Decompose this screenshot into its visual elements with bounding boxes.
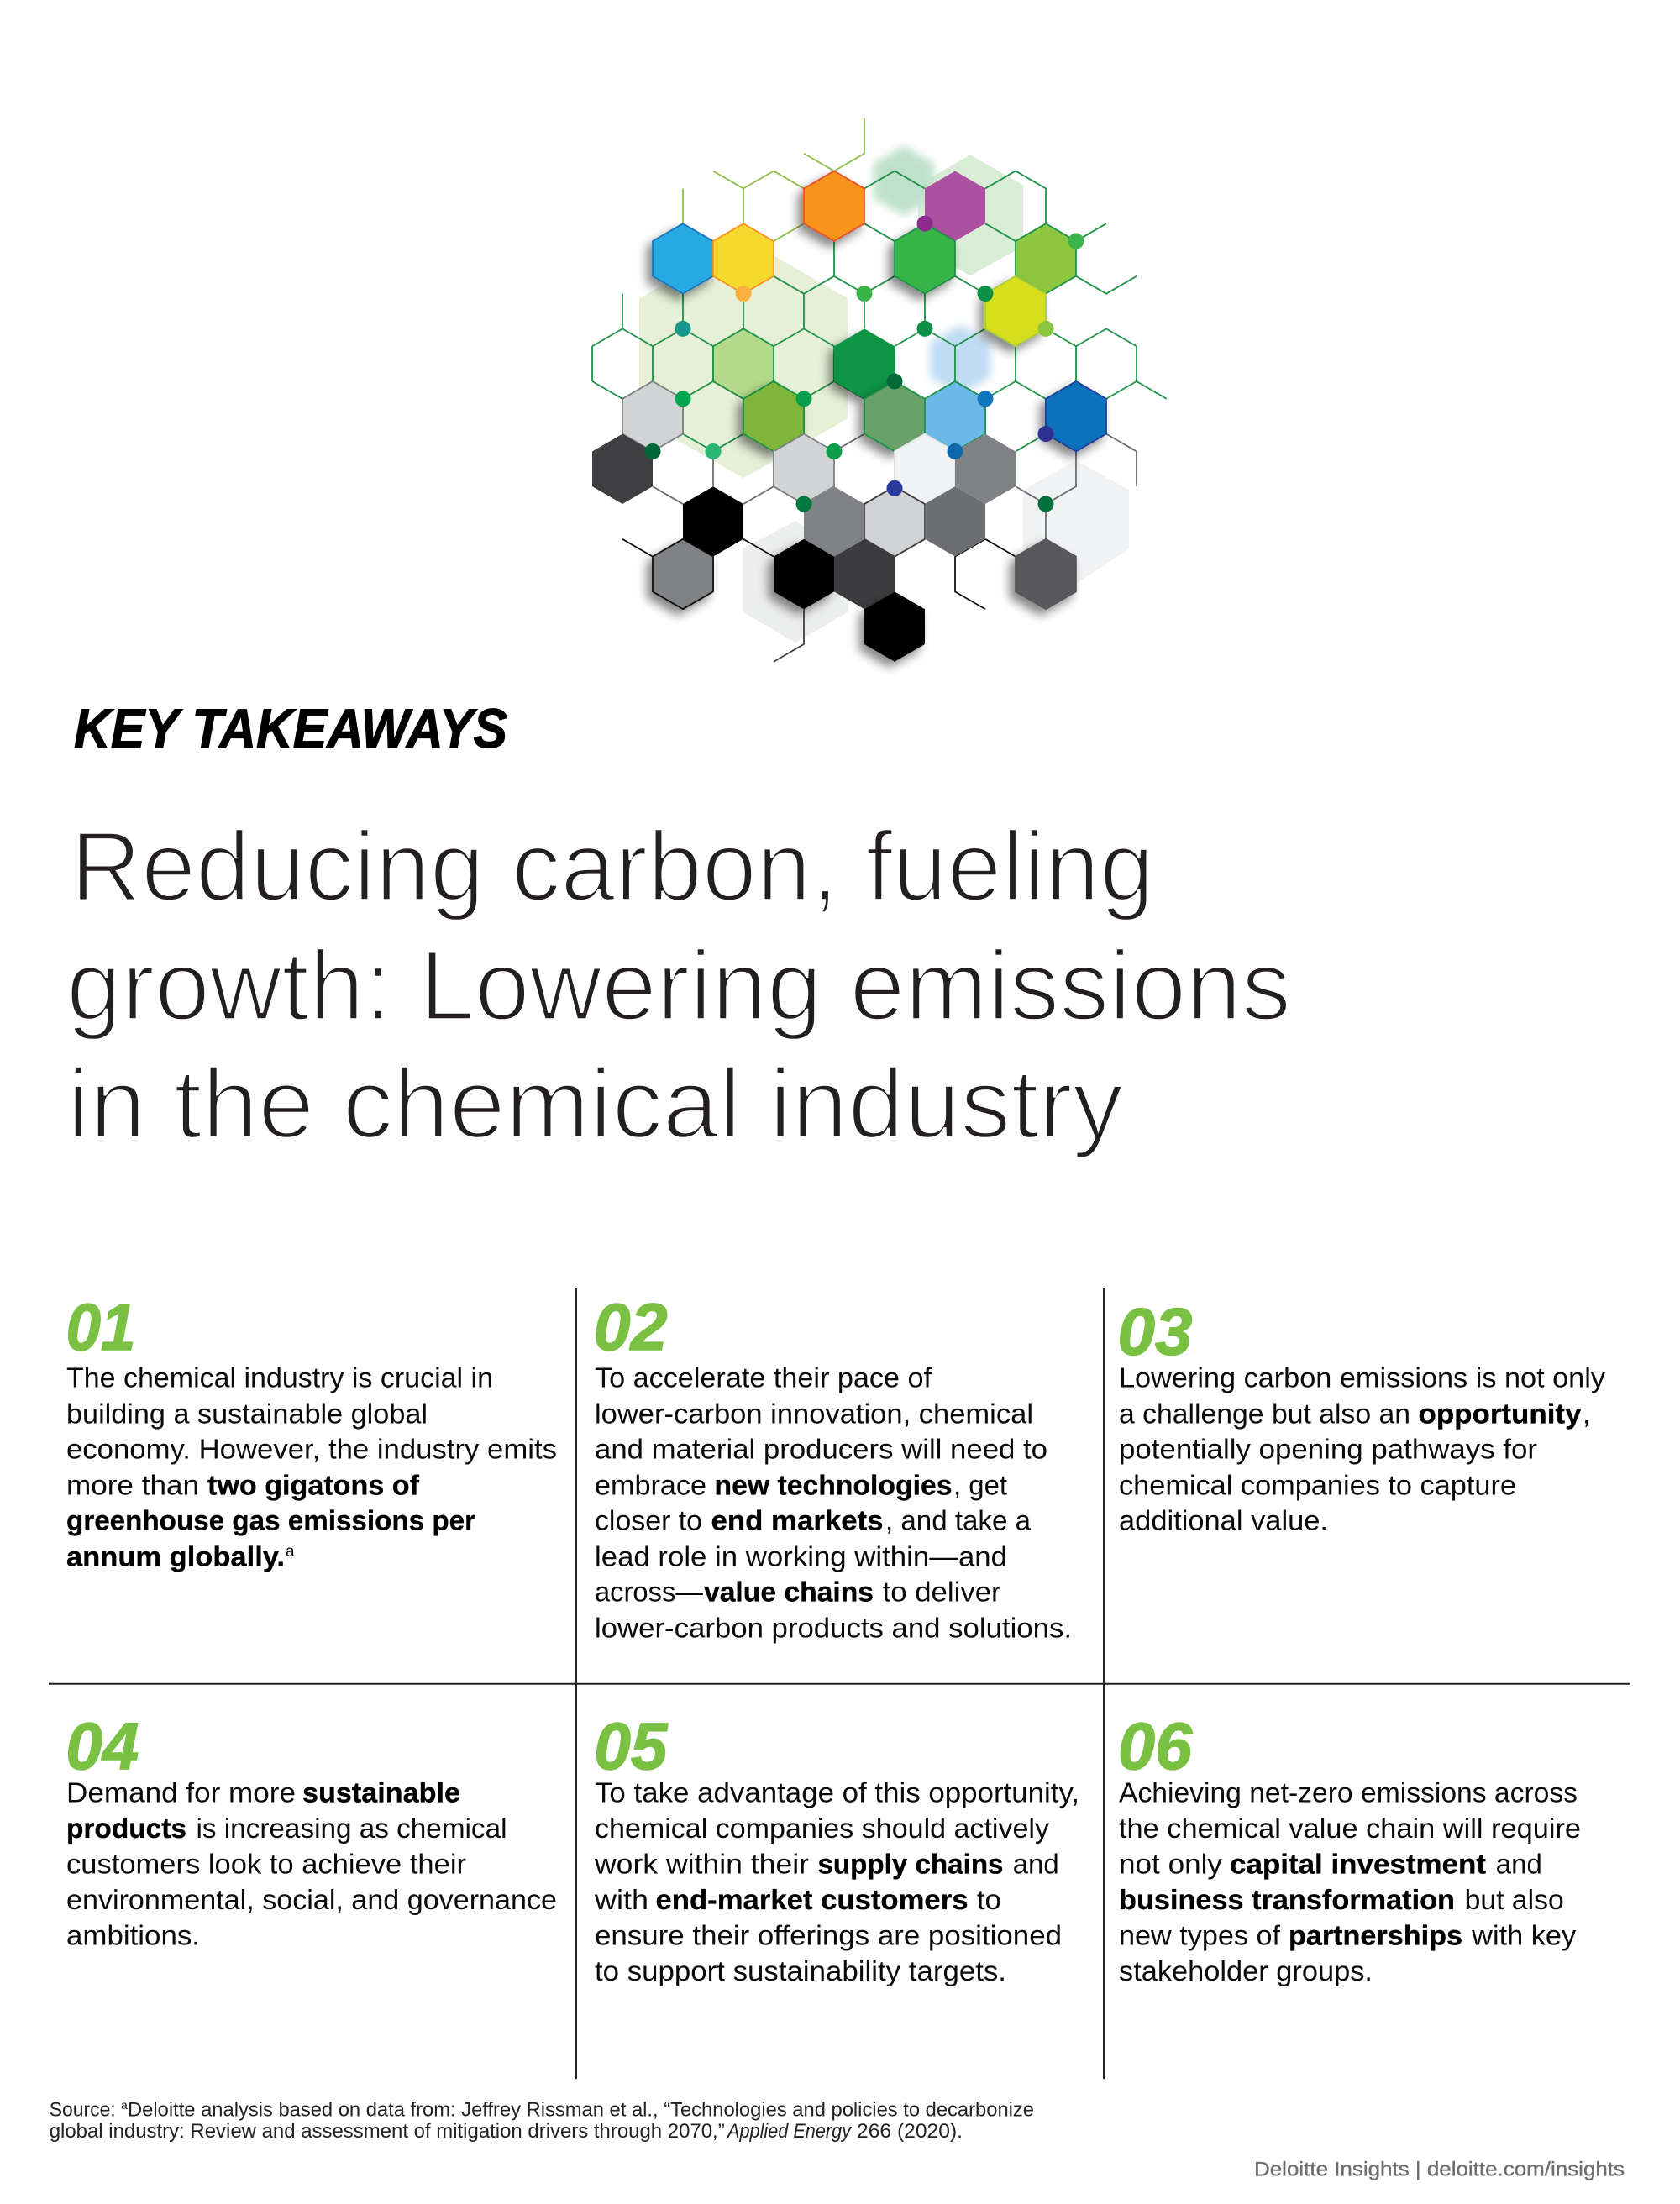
- text 05: [594, 1777, 1079, 1987]
- text 06: Achieving net-zero emissions across: [1119, 1777, 1578, 1809]
- panel: takeaway 02: [594, 1289, 1072, 1644]
- text 02: new technologies: [714, 1470, 953, 1501]
- number 03: 03: [1117, 1294, 1193, 1369]
- text 02: lead role in working within—and: [595, 1541, 1007, 1572]
- text 02: lower-carbon products and solutions.: [595, 1613, 1072, 1644]
- number 02: 02: [594, 1289, 668, 1364]
- text 01: building a sustainable global: [66, 1398, 428, 1430]
- text 01: more than: [66, 1470, 199, 1501]
- text 01: economy. However, the industry emits: [66, 1435, 557, 1466]
- source note: a: [121, 2098, 128, 2112]
- text 05: chemical companies should actively: [595, 1813, 1049, 1845]
- text 01: a: [286, 1543, 295, 1561]
- text 06: stakeholder groups.: [1119, 1956, 1373, 1987]
- text 01: annum globally.: [66, 1541, 285, 1572]
- text 01: [66, 1363, 557, 1572]
- main title: growth: Lowering emissions: [66, 931, 1291, 1042]
- text 05: to support sustainability targets.: [595, 1956, 1006, 1987]
- panel: takeaway 04: [66, 1708, 557, 1952]
- text 03: chemical companies to capture: [1119, 1470, 1516, 1501]
- text 06: new types of: [1119, 1920, 1281, 1952]
- text 03: [1119, 1363, 1605, 1537]
- network lines: [592, 118, 1167, 662]
- text 06: the chemical value chain will require: [1119, 1813, 1581, 1845]
- text 02: and material producers will need to: [595, 1435, 1047, 1466]
- text 02: embrace: [595, 1470, 706, 1501]
- number 06: 06: [1118, 1708, 1193, 1783]
- source note: 266 (2020).: [857, 2120, 963, 2143]
- panel: takeaway 05: [594, 1708, 1079, 1987]
- text 03: additional value.: [1119, 1506, 1328, 1537]
- text 05: supply chains: [818, 1850, 1003, 1880]
- text 04: environmental, social, and governance: [66, 1885, 557, 1916]
- text 05: with: [594, 1885, 648, 1916]
- text 06: but also: [1465, 1885, 1564, 1916]
- text 02: lower-carbon innovation, chemical: [595, 1398, 1033, 1430]
- text 05: To take advantage of this opportunity,: [595, 1777, 1079, 1809]
- text 01: The chemical industry is crucial in: [66, 1363, 493, 1394]
- text 06: business transformation: [1119, 1885, 1455, 1916]
- text 04: is increasing as chemical: [197, 1813, 507, 1845]
- text 04: customers look to achieve their: [66, 1850, 466, 1880]
- text 05: to: [977, 1885, 1001, 1916]
- connection dots: [645, 216, 1084, 512]
- text 06: [1119, 1777, 1581, 1987]
- text 06: and: [1496, 1850, 1542, 1880]
- text 02: across—: [595, 1577, 703, 1608]
- text 02: , and take a: [885, 1506, 1031, 1537]
- text 06: capital investment: [1230, 1850, 1486, 1880]
- number 01: 01: [66, 1289, 136, 1364]
- text 05: end-market customers: [655, 1885, 968, 1916]
- text 03: opportunity: [1418, 1398, 1582, 1430]
- source note: [50, 2098, 1034, 2143]
- eyebrow: key takeaways: KEY TAKEAWAYS: [74, 697, 507, 759]
- panel: takeaway 03: [1117, 1294, 1605, 1537]
- source note: Source:: [50, 2098, 116, 2121]
- text 06: with key: [1471, 1920, 1576, 1952]
- panel: takeaway 01: [66, 1289, 557, 1572]
- text 04: ambitions.: [66, 1920, 200, 1952]
- text 01: two gigatons of: [207, 1470, 420, 1501]
- main title: Reducing carbon, fueling: [71, 811, 1154, 922]
- grid lines: [49, 1288, 1630, 2079]
- text 05: work within their: [594, 1850, 809, 1880]
- text 02: , get: [953, 1470, 1008, 1501]
- source note: global industry: Review and assessment of mitigation drivers through 2070,”: [50, 2120, 725, 2143]
- text 05: and: [1013, 1850, 1059, 1880]
- text 02: to deliver: [883, 1577, 1001, 1608]
- main title: [66, 811, 1291, 1159]
- text 03: ,: [1583, 1398, 1590, 1430]
- coloured hexagons: [592, 171, 1106, 662]
- text 02: value chains: [704, 1577, 874, 1608]
- text 06: not only: [1119, 1850, 1222, 1880]
- text 05: ensure their offerings are positioned: [595, 1920, 1062, 1952]
- source note: Applied Energy: [726, 2120, 853, 2143]
- text 03: potentially opening pathways for: [1119, 1435, 1537, 1466]
- main title: in the chemical industry: [67, 1048, 1123, 1159]
- text 04: sustainable: [302, 1777, 460, 1809]
- number 05: 05: [594, 1708, 668, 1783]
- text 02: [595, 1363, 1072, 1644]
- number 04: 04: [66, 1708, 139, 1783]
- text 06: partnerships: [1289, 1920, 1462, 1952]
- text 03: Lowering carbon emissions is not only: [1119, 1363, 1605, 1394]
- text 04: [66, 1777, 557, 1952]
- text 02: To accelerate their pace of: [595, 1363, 932, 1394]
- pale background hexagons: [639, 146, 1129, 643]
- text 02: closer to: [595, 1506, 702, 1537]
- text 04: products: [66, 1813, 186, 1845]
- panel: takeaway 06: [1118, 1708, 1581, 1987]
- footer credit: Deloitte Insights | deloitte.com/insights: [1254, 2159, 1625, 2181]
- text 04: Demand for more: [66, 1777, 296, 1809]
- source note: Deloitte analysis based on data from: Jeffrey Rissman et al., “Technologies and policies to decarbonize: [128, 2098, 1034, 2121]
- text 02: end markets: [711, 1506, 884, 1537]
- text 01: greenhouse gas emissions per: [66, 1506, 475, 1537]
- text 03: a challenge but also an: [1119, 1398, 1410, 1430]
- illustration: hexagon molecule network: [592, 118, 1167, 662]
